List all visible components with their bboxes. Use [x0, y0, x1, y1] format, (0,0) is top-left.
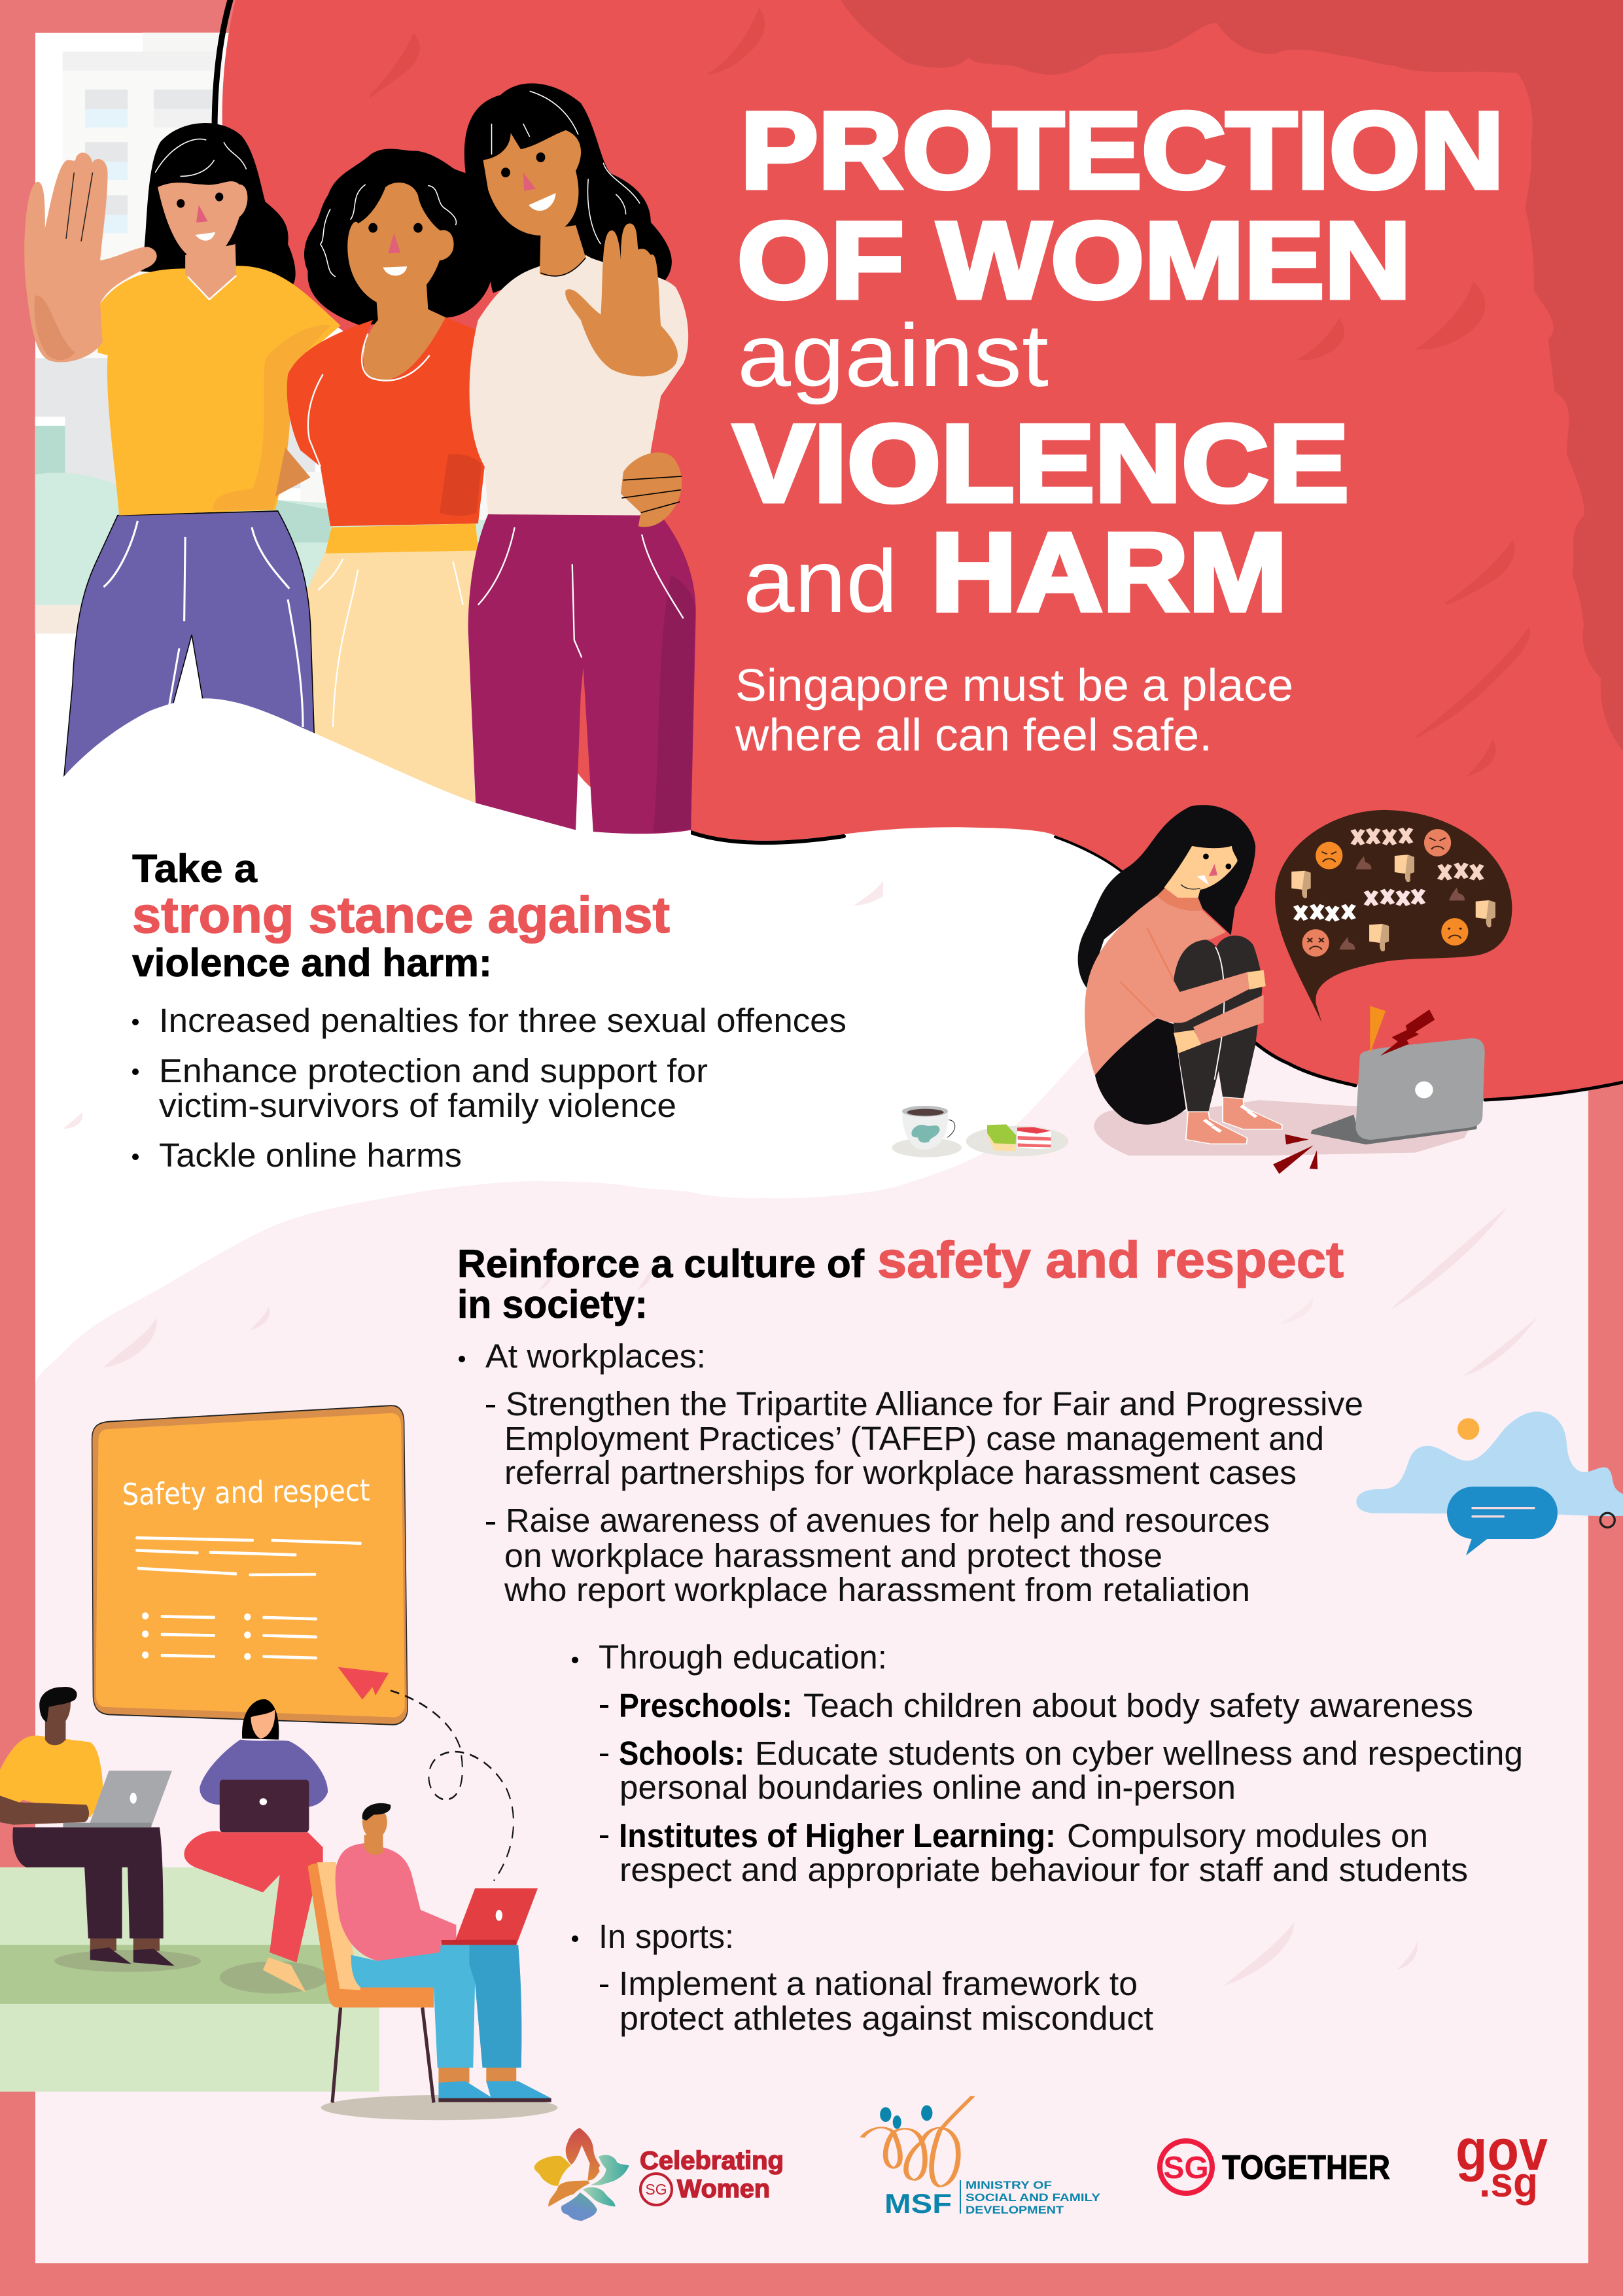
- heading: strong stance: [132, 847, 670, 985]
- illustration: three women raising hands: [24, 83, 696, 834]
- warning bolts: [1370, 1006, 1386, 1053]
- black outline of blob: [215, 0, 1623, 1100]
- woman right shirt: [470, 255, 688, 516]
- logo: SG Together: TOGETHER: [1222, 2149, 1390, 2187]
- dark torn paint patch: [841, 0, 1623, 751]
- list: workplaces: [459, 1337, 1363, 1608]
- list: sports: In sports:: [599, 1918, 734, 1955]
- noticeboard: [92, 1405, 408, 1725]
- pink lower panel: [35, 981, 1588, 2263]
- woman right hand on waist: [621, 452, 682, 527]
- face: [1164, 846, 1238, 898]
- subtitle: [735, 660, 1293, 760]
- list: education: Through education:: [599, 1638, 887, 1676]
- woman right trousers: [468, 514, 696, 834]
- logo: MSF: MINISTRY OF: [966, 2179, 1052, 2191]
- laptop: [1311, 1115, 1477, 1144]
- list: sports: Implement a national framework to: [619, 1965, 1138, 2002]
- woman right hair: [464, 83, 672, 293]
- woman left head: [185, 244, 236, 300]
- logo: Celebrating SG Women: Celebrating: [640, 2147, 784, 2175]
- noticeboard lines and bullets: [137, 1538, 360, 1658]
- heading: strong stance: Take a: [132, 847, 258, 891]
- list: sports: [572, 1918, 1153, 2037]
- logo: MSF: DEVELOPMENT: [966, 2204, 1064, 2216]
- logo: Celebrating SG Women: SG: [645, 2181, 667, 2198]
- subtitle: where all can feel safe.: [735, 709, 1212, 760]
- woman left raised hand: [24, 152, 157, 362]
- list: stance measures: [132, 1002, 846, 1174]
- logo: MSF: SOCIAL AND FAMILY: [966, 2191, 1101, 2204]
- heading: safety and respect: safety and respect: [877, 1231, 1344, 1288]
- list: workplaces: on workplace harassment and protect those: [504, 1537, 1162, 1574]
- title: OF WOMEN: [737, 200, 1411, 321]
- sweater: [1085, 896, 1249, 1075]
- heading: safety and respect: [457, 1231, 1344, 1326]
- logo: gov.sg: .sg: [1479, 2159, 1538, 2206]
- red brush marks: [370, 8, 1530, 777]
- pale brush marks: [63, 845, 1537, 1986]
- list: workplaces: At workplaces:: [485, 1337, 706, 1375]
- list: education: Preschools:: [619, 1687, 792, 1724]
- list: workplaces: referral partnerships for workplace harassment cases: [504, 1454, 1297, 1491]
- green steps: [0, 1867, 379, 2092]
- logo: SG Together: [1160, 2141, 1390, 2193]
- list: education: Institutes of Higher Learning:: [619, 1817, 1056, 1854]
- title: HARM: [931, 510, 1287, 635]
- hair: [1078, 805, 1255, 989]
- woman right raised hand: [565, 223, 678, 376]
- list: stance measures: victim-survivors of family violence: [159, 1087, 676, 1124]
- text on noticeboard: Safety and respect: [122, 1472, 370, 1512]
- list: education: Compulsory modules on: [1067, 1817, 1428, 1854]
- subtitle: Singapore must be a place: [735, 660, 1293, 711]
- dashed flight path: [391, 1691, 514, 1881]
- list: stance measures: Enhance protection and support for: [159, 1052, 708, 1089]
- emoji faces: [1316, 842, 1342, 870]
- hands: [1174, 970, 1266, 1053]
- list: sports: protect athletes against misconduct: [620, 2000, 1153, 2037]
- logo: gov.sg: [1456, 2117, 1548, 2206]
- woman left trouser creases: [103, 521, 303, 727]
- background scene: buildings and park: [35, 33, 488, 633]
- white wave overlapping legs: [39, 698, 691, 916]
- illustration: cloud and chat bubble: [1356, 1411, 1623, 1555]
- list: education: personal boundaries online and in-person: [620, 1769, 1236, 1806]
- collar: [1157, 887, 1203, 911]
- list: education: [572, 1638, 1523, 1888]
- woman middle shirt: [287, 317, 485, 526]
- woman left trousers: [64, 511, 315, 776]
- list: workplaces: Employment Practices’ (TAFEP) case management and: [504, 1420, 1324, 1457]
- heading: safety and respect: Reinforce a culture of: [457, 1242, 865, 1286]
- title: [733, 90, 1504, 635]
- paper plane: [338, 1667, 389, 1699]
- MSF figure mark: [862, 2096, 973, 2187]
- woman left hair: [140, 123, 296, 285]
- poop icons: [1339, 856, 1465, 949]
- logo: Celebrating SG Women: [534, 2128, 784, 2221]
- thumbs-down icons: [1291, 855, 1495, 951]
- list: stance measures: Tackle online harms: [159, 1137, 462, 1174]
- woman middle neck and face: [363, 285, 445, 380]
- list: education: Schools:: [619, 1735, 744, 1772]
- logo: gov.sg: gov: [1456, 2117, 1548, 2182]
- illustration: coffee cup and kueh: [892, 1106, 1068, 1157]
- title: against: [737, 306, 1049, 405]
- floor shadow: [1094, 1100, 1480, 1156]
- logo: Celebrating SG Women: Women: [677, 2175, 770, 2203]
- list: stance measures: Increased penalties for three sexual offences: [159, 1002, 846, 1039]
- list: education: respect and appropriate behaviour for staff and students: [620, 1851, 1468, 1888]
- woman middle belt: [325, 523, 478, 554]
- woman left shirt: [97, 266, 340, 516]
- speech bubble: [1275, 810, 1512, 1023]
- list: workplaces: Strengthen the Tripartite Alliance for Fair and Progressive: [506, 1385, 1363, 1422]
- legs: [1174, 936, 1262, 1112]
- logo: MSF: MSF: [884, 2188, 952, 2219]
- title: and: [743, 531, 898, 631]
- person: man on chair: [308, 1803, 557, 2120]
- heading: safety and respect: in society:: [457, 1282, 648, 1326]
- red header blob: [222, 0, 1623, 1099]
- abuse star marks: [1353, 828, 1482, 879]
- heading: strong stance: violence and harm:: [132, 941, 492, 985]
- woman middle hair: [304, 149, 495, 325]
- illustration: green steps and people with laptops: [0, 1405, 557, 2120]
- logo: SG Together: SG: [1163, 2151, 1209, 2185]
- person: woman in purple: [184, 1699, 328, 1994]
- heading: strong stance: strong stance against: [132, 886, 670, 944]
- woman right head: [540, 225, 585, 276]
- woman middle skirt: [306, 551, 478, 808]
- illustration: distressed woman with laptop: [1078, 805, 1512, 1174]
- hips: [1095, 1018, 1186, 1125]
- logo: MSF: [862, 2096, 1101, 2219]
- petal icon: [534, 2128, 629, 2221]
- title: VIOLENCE: [733, 402, 1349, 525]
- list: workplaces: who report workplace harassment from retaliation: [504, 1571, 1250, 1608]
- list: education: Educate students on cyber wellness and respecting: [755, 1735, 1523, 1772]
- person: man in yellow: [0, 1687, 201, 1972]
- skin arm behind middle woman: [275, 448, 310, 497]
- shoes: [1223, 1097, 1282, 1129]
- title: PROTECTION: [741, 90, 1504, 211]
- list: workplaces: Raise awareness of avenues for help and resources: [506, 1502, 1270, 1539]
- list: education: Teach children about body safety awareness: [803, 1687, 1473, 1724]
